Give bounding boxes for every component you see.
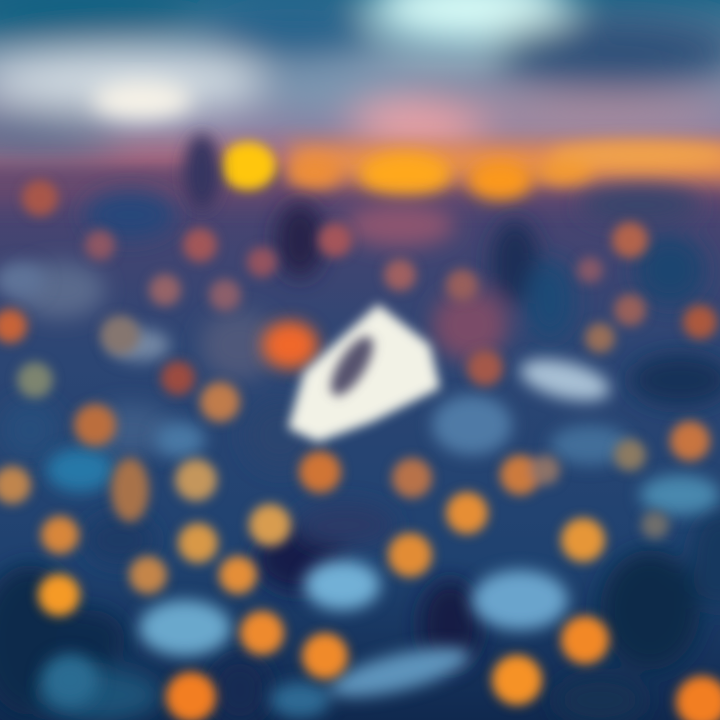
sun (220, 142, 276, 190)
horizon glow (0, 145, 720, 204)
white shape body (288, 304, 440, 442)
bright cloud highlight (92, 81, 192, 119)
dark mark in white shape (323, 330, 381, 402)
tall tower silhouette (184, 134, 220, 210)
central white shape (288, 304, 440, 442)
red-orange glow beside the white shape (262, 321, 318, 369)
sunset band (289, 142, 720, 200)
panel: sky background (0, 0, 720, 190)
orange window lights, large (0, 180, 720, 720)
sky clouds and light (0, 0, 720, 159)
panel: city background (0, 190, 720, 720)
city dark and mid tones (0, 187, 720, 720)
light blue rooftops (0, 262, 720, 718)
